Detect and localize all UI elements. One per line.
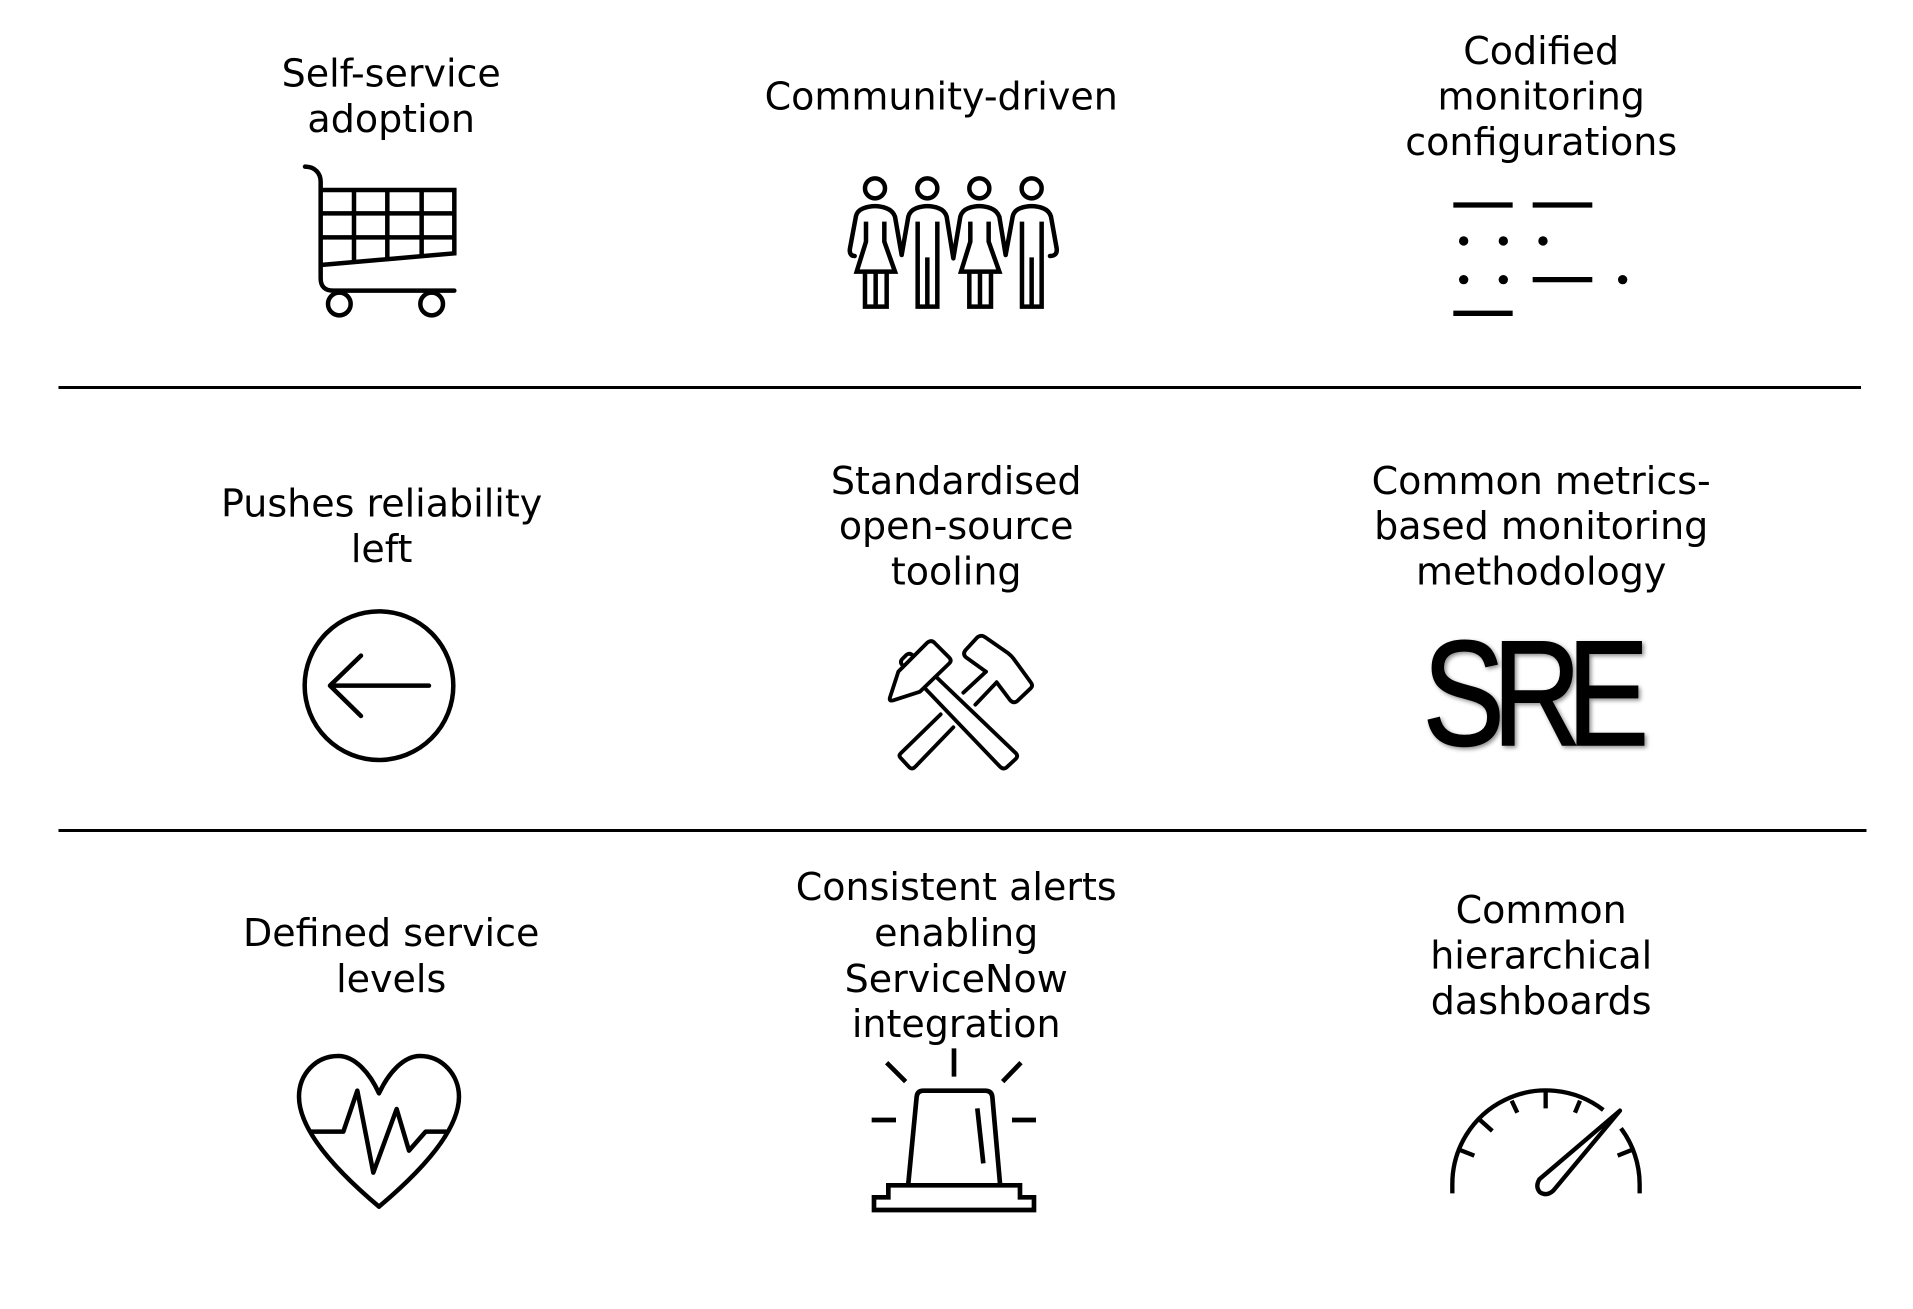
heading: codified monitoring configurations: Codified	[1463, 29, 1619, 73]
panel: codified monitoring configurations	[1405, 29, 1677, 313]
panel: common hierarchical dashboards	[1430, 888, 1652, 1194]
heading: codified monitoring configurations: configurations	[1405, 120, 1677, 164]
icon: crossed hammers	[890, 636, 1032, 769]
icon: morse code	[1453, 205, 1627, 313]
panel: common metrics-based monitoring methodology	[1372, 459, 1711, 778]
panel: pushes reliability left	[221, 482, 542, 760]
heading: consistent alerts enabling ServiceNow integration: integration	[852, 1002, 1061, 1046]
icon: left arrow in circle	[305, 611, 453, 760]
heading: defined service levels: levels	[336, 957, 446, 1001]
heading: common metrics-based monitoring methodology: based monitoring	[1374, 504, 1708, 548]
heading: common hierarchical dashboards: dashboards	[1431, 979, 1652, 1023]
icon: four people	[850, 178, 1057, 307]
heading: standardised open-source tooling: open-source	[839, 504, 1074, 548]
panel: standardised open-source tooling	[831, 459, 1082, 769]
icon: SRE wordmark: R	[1492, 610, 1581, 778]
panel: community-driven	[765, 74, 1118, 307]
heading: defined service levels: Defined service	[243, 911, 539, 955]
heading: self-service adoption: Self-service	[282, 52, 501, 96]
icon: shopping cart	[305, 167, 454, 315]
panel: consistent alerts enabling ServiceNow integration	[796, 865, 1117, 1210]
icon: gauge dial	[1452, 1090, 1640, 1194]
heading: consistent alerts enabling ServiceNow integration: Consistent alerts	[796, 865, 1117, 909]
icon: heart with pulse	[299, 1056, 459, 1207]
panel: defined service levels	[243, 911, 539, 1207]
icon: SRE wordmark: S	[1423, 610, 1505, 778]
heading: common hierarchical dashboards: Common	[1456, 888, 1627, 932]
heading: codified monitoring configurations: monitoring	[1437, 74, 1645, 118]
heading: common metrics-based monitoring methodology: methodology	[1416, 550, 1666, 594]
heading: consistent alerts enabling ServiceNow integration: enabling	[874, 911, 1038, 955]
heading: pushes reliability left: Pushes reliability	[221, 482, 542, 526]
icon: SRE wordmark: E	[1567, 610, 1649, 778]
panel: self-service adoption	[282, 52, 501, 315]
icon: alarm beacon	[872, 1048, 1036, 1210]
heading: pushes reliability left: left	[351, 527, 412, 571]
heading: consistent alerts enabling ServiceNow integration: ServiceNow	[845, 957, 1068, 1001]
icon: SRE wordmark	[1423, 610, 1649, 778]
heading: self-service adoption: adoption	[307, 97, 475, 141]
heading: common metrics-based monitoring methodology: Common metrics-	[1372, 459, 1711, 503]
heading: standardised open-source tooling: Standardised	[831, 459, 1082, 503]
heading: community-driven: Community-driven	[765, 74, 1118, 118]
heading: common hierarchical dashboards: hierarchical	[1430, 933, 1652, 977]
heading: standardised open-source tooling: tooling	[891, 550, 1022, 594]
